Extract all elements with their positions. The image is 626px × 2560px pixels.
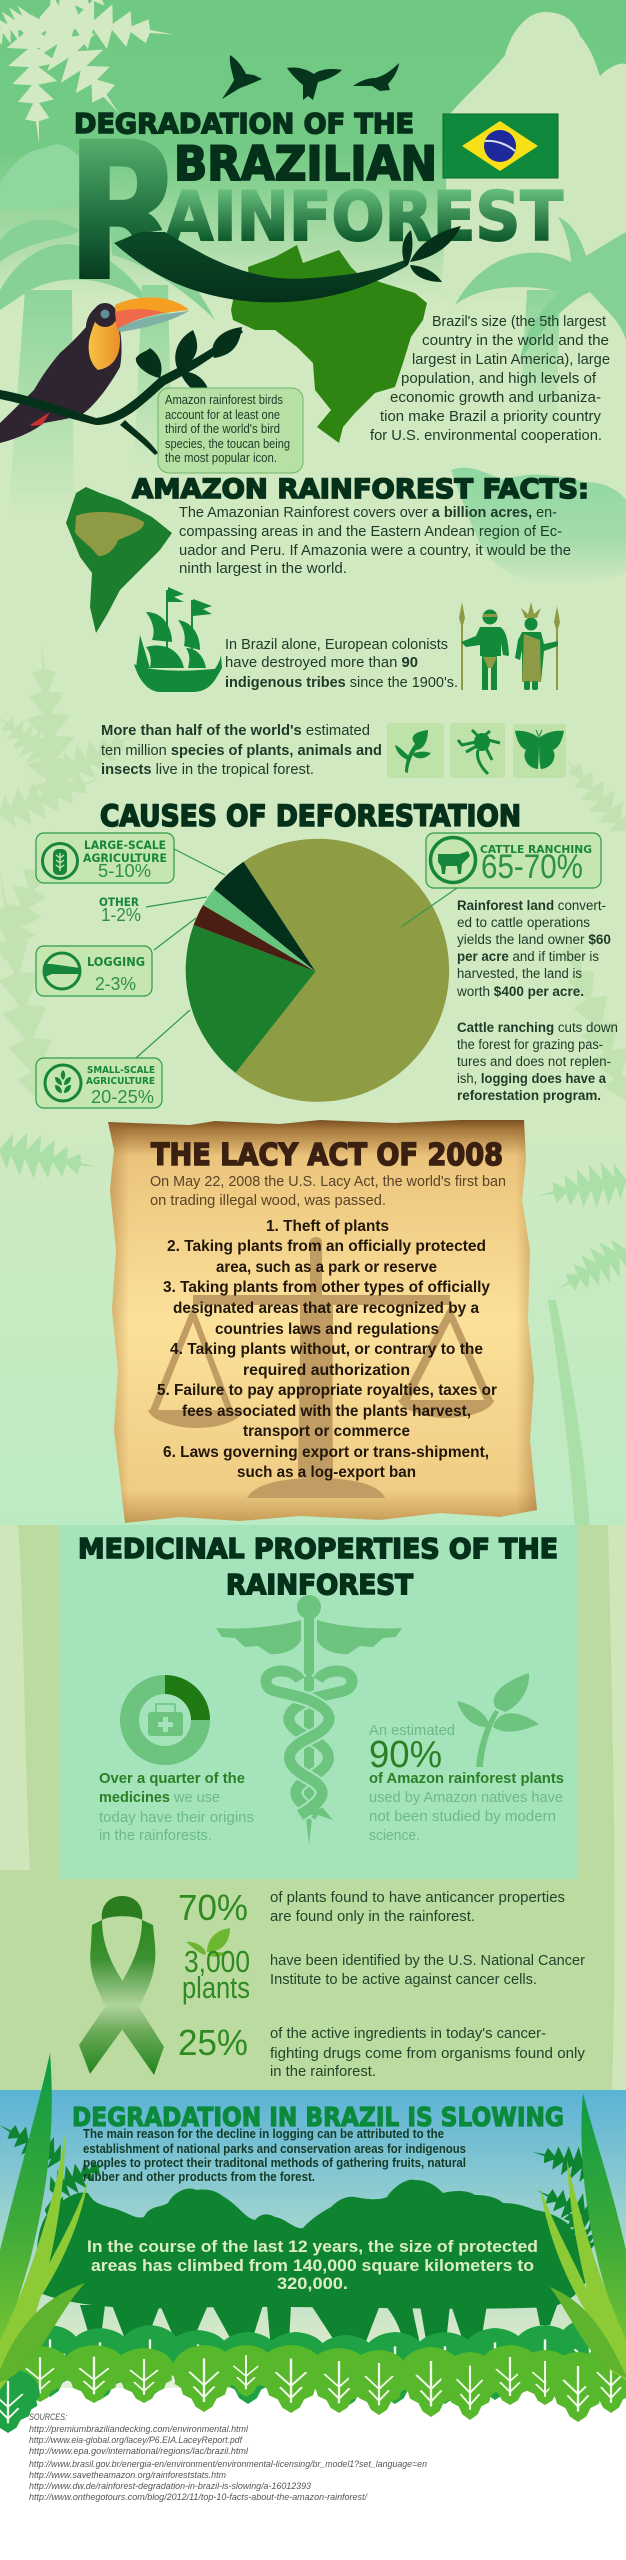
text block: species: More than half of the world's estimated [101,722,370,739]
icon: green cancer ribbon [79,1896,164,2075]
icon: colonial ship [134,587,222,692]
chart: quarter donut with medical kit [130,1675,210,1756]
numbered list of offences: 6. Laws governing export or trans-shipment, [163,1444,489,1461]
heading: medicinal properties: MEDICINAL PROPERTIES OF THE [78,1532,558,1565]
icon: plant tile [387,723,444,778]
sources list: http://www.eia-global.org/lacey/P6.EIA.LaceyReport.pdf [29,2435,243,2446]
callout: small-scale agriculture: AGRICULTURE [86,1076,155,1087]
numbered list of offences: required authorization [243,1362,410,1379]
stat: 25 percent: of the active ingredients in today's cancer- [270,2025,546,2042]
text block: Brazil overview: population, and high levels of [401,370,597,387]
Brazilian flag [443,114,558,178]
foliage: left grass blades [0,2053,88,2390]
text block: ranching vs logging: tures and does not replen- [457,1054,611,1069]
heading: the Lacy Act of 2008: THE LACY ACT OF 2008 [151,1138,503,1173]
sources list: http://www.brasil.gov.br/energia-en/environment/environmental-licensing/br_model1?set_language=en [29,2459,427,2470]
heading line: ainforest: AINFOREST [165,178,564,257]
stat: 70 percent: 70% [178,1887,248,1928]
callout: logging: 2-3% [95,974,136,994]
stat: 70 percent: are found only in the rainforest. [270,1908,475,1925]
background: medicinal and cancer band [0,1525,626,2095]
background: palm trunks [8,285,560,520]
forest silhouette [37,2180,588,2362]
callout: toucan fact: account for at least one [165,408,280,422]
text block: reason for decline: rubber and other products from the forest. [83,2170,315,2184]
panel: medicinal properties [60,1525,578,1879]
callout: logging: LOGGING [87,954,145,969]
sources list [29,2412,427,2503]
panel: Lacy Act scroll [108,1120,537,1523]
intro text: On May 22, 2008 the U.S. Lacy Act, the world's first ban [150,1173,506,1190]
callout: large-scale agriculture: LARGE-SCALE [84,838,166,852]
numbered list of offences: such as a log-export ban [237,1464,416,1481]
intro text: on trading illegal wood, was passed. [150,1192,386,1209]
text block: indigenous tribes [225,636,458,691]
text block: 90 percent of plants: used by Amazon natives have [369,1789,563,1806]
callout: other: 1-2% [101,905,141,925]
stat: 3,000 plants: plants [182,1970,250,2005]
heading line: degradation of the: DEGRADATION OF THE [74,107,414,140]
text block: quarter of medicines [99,1770,254,1844]
stat: 25 percent: fighting drugs come from organisms found only [270,2045,585,2062]
background: pale lower page [0,299,626,1119]
callout: small-scale agriculture: SMALL-SCALE [87,1065,155,1076]
text block: indigenous tribes: have destroyed more than 90 [225,654,418,671]
Brazil map [231,245,427,443]
stat: 70 percent [178,1887,565,1928]
heading line: brazilian: BRAZILIAN [174,137,437,192]
sources list: http://www.dw.de/rainforest-degradation-in-brazil-is-slowing/a-16012393 [29,2481,312,2492]
sources list: http://www.savetheamazon.org/rainforeststats.htm [29,2470,226,2481]
stat: 25 percent: 25% [178,2022,248,2063]
toucan on a branch [0,297,243,455]
text block: Amazon extent: ninth largest in the world. [179,560,347,577]
text block: ranching vs logging: ish, logging does have a [457,1071,606,1086]
text block: indigenous tribes: indigenous tribes since the 1900's. [225,674,458,691]
numbered list of offences: 4. Taking plants without, or contrary to the [170,1341,483,1358]
stat: 3,000 plants: Institute to be active against cancer cells. [270,1971,537,1988]
callout: cattle ranching [401,833,601,927]
icon: sprout [457,1673,539,1767]
text block: ranching vs logging: reforestation program. [457,1088,601,1103]
text block: 90 percent of plants: An estimated [369,1722,455,1739]
icon: frog tile [450,723,505,778]
numbered list of offences: 3. Taking plants from other types of officially [163,1279,490,1296]
text block: Amazon extent: compassing areas in and the Eastern Andean region of Ec- [179,523,562,540]
sources list: http://www.epa.gov/international/regions/lac/brazil.html [29,2446,249,2457]
text block: 90 percent of plants: not been studied by modern [369,1808,556,1825]
text block: 90 percent of plants [369,1722,564,1844]
numbered list of offences: 1. Theft of plants [266,1218,389,1235]
text block: cattle land value: yields the land owner $60 [457,932,611,947]
icon: scales of justice [148,1237,494,1498]
text block: ranching vs logging: the forest for grazing pas- [457,1037,603,1052]
numbered list of offences: area, such as a park or reserve [216,1259,437,1276]
background: left and centre palms [0,220,215,320]
callout: protected areas: areas has climbed from 140,000 square kilometers to [91,2256,534,2275]
text block: Brazil overview: country in the world and the [422,332,609,349]
text block: quarter of medicines: today have their origins [99,1809,254,1826]
text block: cattle land value: ed to cattle operations [457,915,590,930]
pie chart: causes of deforestation [186,839,449,1102]
heading: causes of deforestation: CAUSES OF DEFORESTATION [100,799,521,833]
text block: Amazon extent: uador and Peru. If Amazonia were a country, it would be the [179,542,571,559]
heading: degradation in Brazil is slowing: DEGRADATION IN BRAZIL IS SLOWING [72,2103,564,2133]
text block: 90 percent of plants: of Amazon rainforest plants [369,1770,564,1787]
stat: 70 percent: of plants found to have anticancer properties [270,1889,565,1906]
text block: cattle land value: harvested, the land is [457,966,582,981]
text block: 90 percent of plants: science. [369,1827,420,1844]
foliage: right grass blades [540,2093,626,2380]
heading: Amazon rainforest facts: AMAZON RAINFOREST FACTS: [132,474,589,505]
text block: ranching vs logging: Cattle ranching cuts down [457,1020,618,1035]
background: right palm canopy [455,217,626,360]
numbered list of offences: fees associated with the plants harvest, [182,1403,471,1420]
swoosh: leg of the R with leaves [114,226,461,302]
background: top-left palm fronds [0,0,177,146]
text block: Brazil overview: largest in Latin America), large [412,351,610,368]
sources list: http://premiumbraziliandecking.com/environmental.html [29,2424,249,2435]
text block: indigenous tribes: In Brazil alone, European colonists [225,636,448,653]
callout: large-scale agriculture [36,833,225,883]
numbered list of offences: countries laws and regulations [215,1321,439,1338]
text block: cattle land value [456,898,611,999]
South America map [66,487,172,633]
background: top sky gradient [0,0,626,300]
intro text [150,1173,506,1209]
callout: protected areas: 320,000. [277,2274,348,2293]
foliage: leaf row [0,2318,626,2433]
callout: toucan fact [158,388,303,473]
callout: other [99,895,207,925]
callout: large-scale agriculture: 5-10% [98,861,151,881]
background: palms beside the scroll [0,1128,626,1530]
heading letter: big R: R [66,102,184,323]
white page foot [0,2388,626,2560]
callout: toucan fact: third of the world's bird [165,422,280,436]
heading: medicinal properties: RAINFOREST [226,1568,413,1601]
sources list: SOURCES: [29,2412,67,2423]
text block: quarter of medicines: Over a quarter of the [99,1770,245,1787]
stat: 3,000 plants [182,1928,585,2005]
callout: cattle ranching: CATTLE RANCHING [480,843,592,856]
title [76,55,564,279]
callout: toucan fact: Amazon rainforest birds [165,393,283,407]
callout: small-scale agriculture [36,1010,190,1108]
text block: species: insects live in the tropical forest. [101,761,314,778]
text block: Brazil overview: tion make Brazil a priority country [380,408,601,425]
stat: 3,000 plants: have been identified by the U.S. National Cancer [270,1952,585,1969]
background: top-right tree silhouette [440,12,626,300]
numbered list of offences: transport or commerce [243,1423,410,1440]
text block: Amazon extent [179,504,571,577]
text block: cattle land value: per acre and if timber is [457,949,599,964]
callout: cattle ranching: 65-70% [481,848,583,886]
ferns behind forest [0,2110,607,2258]
numbered list of offences: 2. Taking plants from an officially protected [167,1238,486,1255]
text block: reason for decline: peoples to protect their traditonal methods of gathering fruits, natural [83,2156,466,2170]
callout: small-scale agriculture: 20-25% [91,1087,154,1107]
callout: large-scale agriculture: AGRICULTURE [83,851,167,865]
stat: 25 percent: in the rainforest. [270,2063,376,2080]
sources list: http://www.onthegotours.com/blog/2012/11/top-10-facts-about-the-amazon-rainforest/ [29,2492,368,2503]
text block: Brazil overview [370,313,610,444]
numbered list of offences: designated areas that are recognized by a [173,1300,479,1317]
text block: ranching vs logging [457,1020,618,1103]
callout: protected areas [87,2237,538,2293]
text block: reason for decline: establishment of national parks and conservation areas for indigenous [83,2142,466,2156]
icon: caduceus [216,1595,402,1845]
callout: other: OTHER [99,895,139,909]
stat: 25 percent [178,2022,585,2080]
panel: degradation is slowing [0,2090,626,2390]
text block: cattle land value: Rainforest land convert- [457,898,606,913]
background: lower left ferns [0,638,626,1107]
callout: logging [36,918,196,996]
heading: medicinal properties [78,1532,558,1601]
parchment [108,1120,537,1523]
text block: Brazil overview: Brazil's size (the 5th largest [432,313,607,330]
icon: indigenous people [459,602,560,690]
text block: species [101,722,382,778]
text block: quarter of medicines: in the rainforests. [99,1827,212,1844]
background: pale side trunks [0,1525,626,2090]
text block: Brazil overview: economic growth and urbaniza- [390,389,601,406]
birds [222,55,399,100]
numbered list of offences: 5. Failure to pay appropriate royalties, taxes or [157,1382,497,1399]
text block: Brazil overview: for U.S. environmental cooperation. [370,427,602,444]
text block: Amazon extent: The Amazonian Rainforest covers over a billion acres, en- [179,504,557,521]
background: mint band behind the scroll [0,1105,626,1530]
callout: toucan fact: species, the toucan being [165,437,290,451]
text block: 90 percent of plants: 90% [369,1734,442,1776]
text block: species: ten million species of plants, animals and [101,742,382,759]
numbered list of offences [157,1218,497,1481]
stat: 3,000 plants: 3,000 [184,1944,250,1979]
callout: toucan fact: the most popular icon. [165,451,277,465]
background: facts tree cloud [451,468,626,585]
callout: protected areas: In the course of the last 12 years, the size of protected [87,2237,538,2256]
text block: reason for decline: The main reason for the decline in logging can be attributed to the [83,2127,444,2141]
text block: reason for decline [83,2127,466,2184]
background: left cloud tree [0,144,89,210]
icon: butterfly tile [513,724,566,778]
text block: cattle land value: worth $400 per acre. [456,984,584,999]
text block: quarter of medicines: medicines we use [99,1789,220,1806]
